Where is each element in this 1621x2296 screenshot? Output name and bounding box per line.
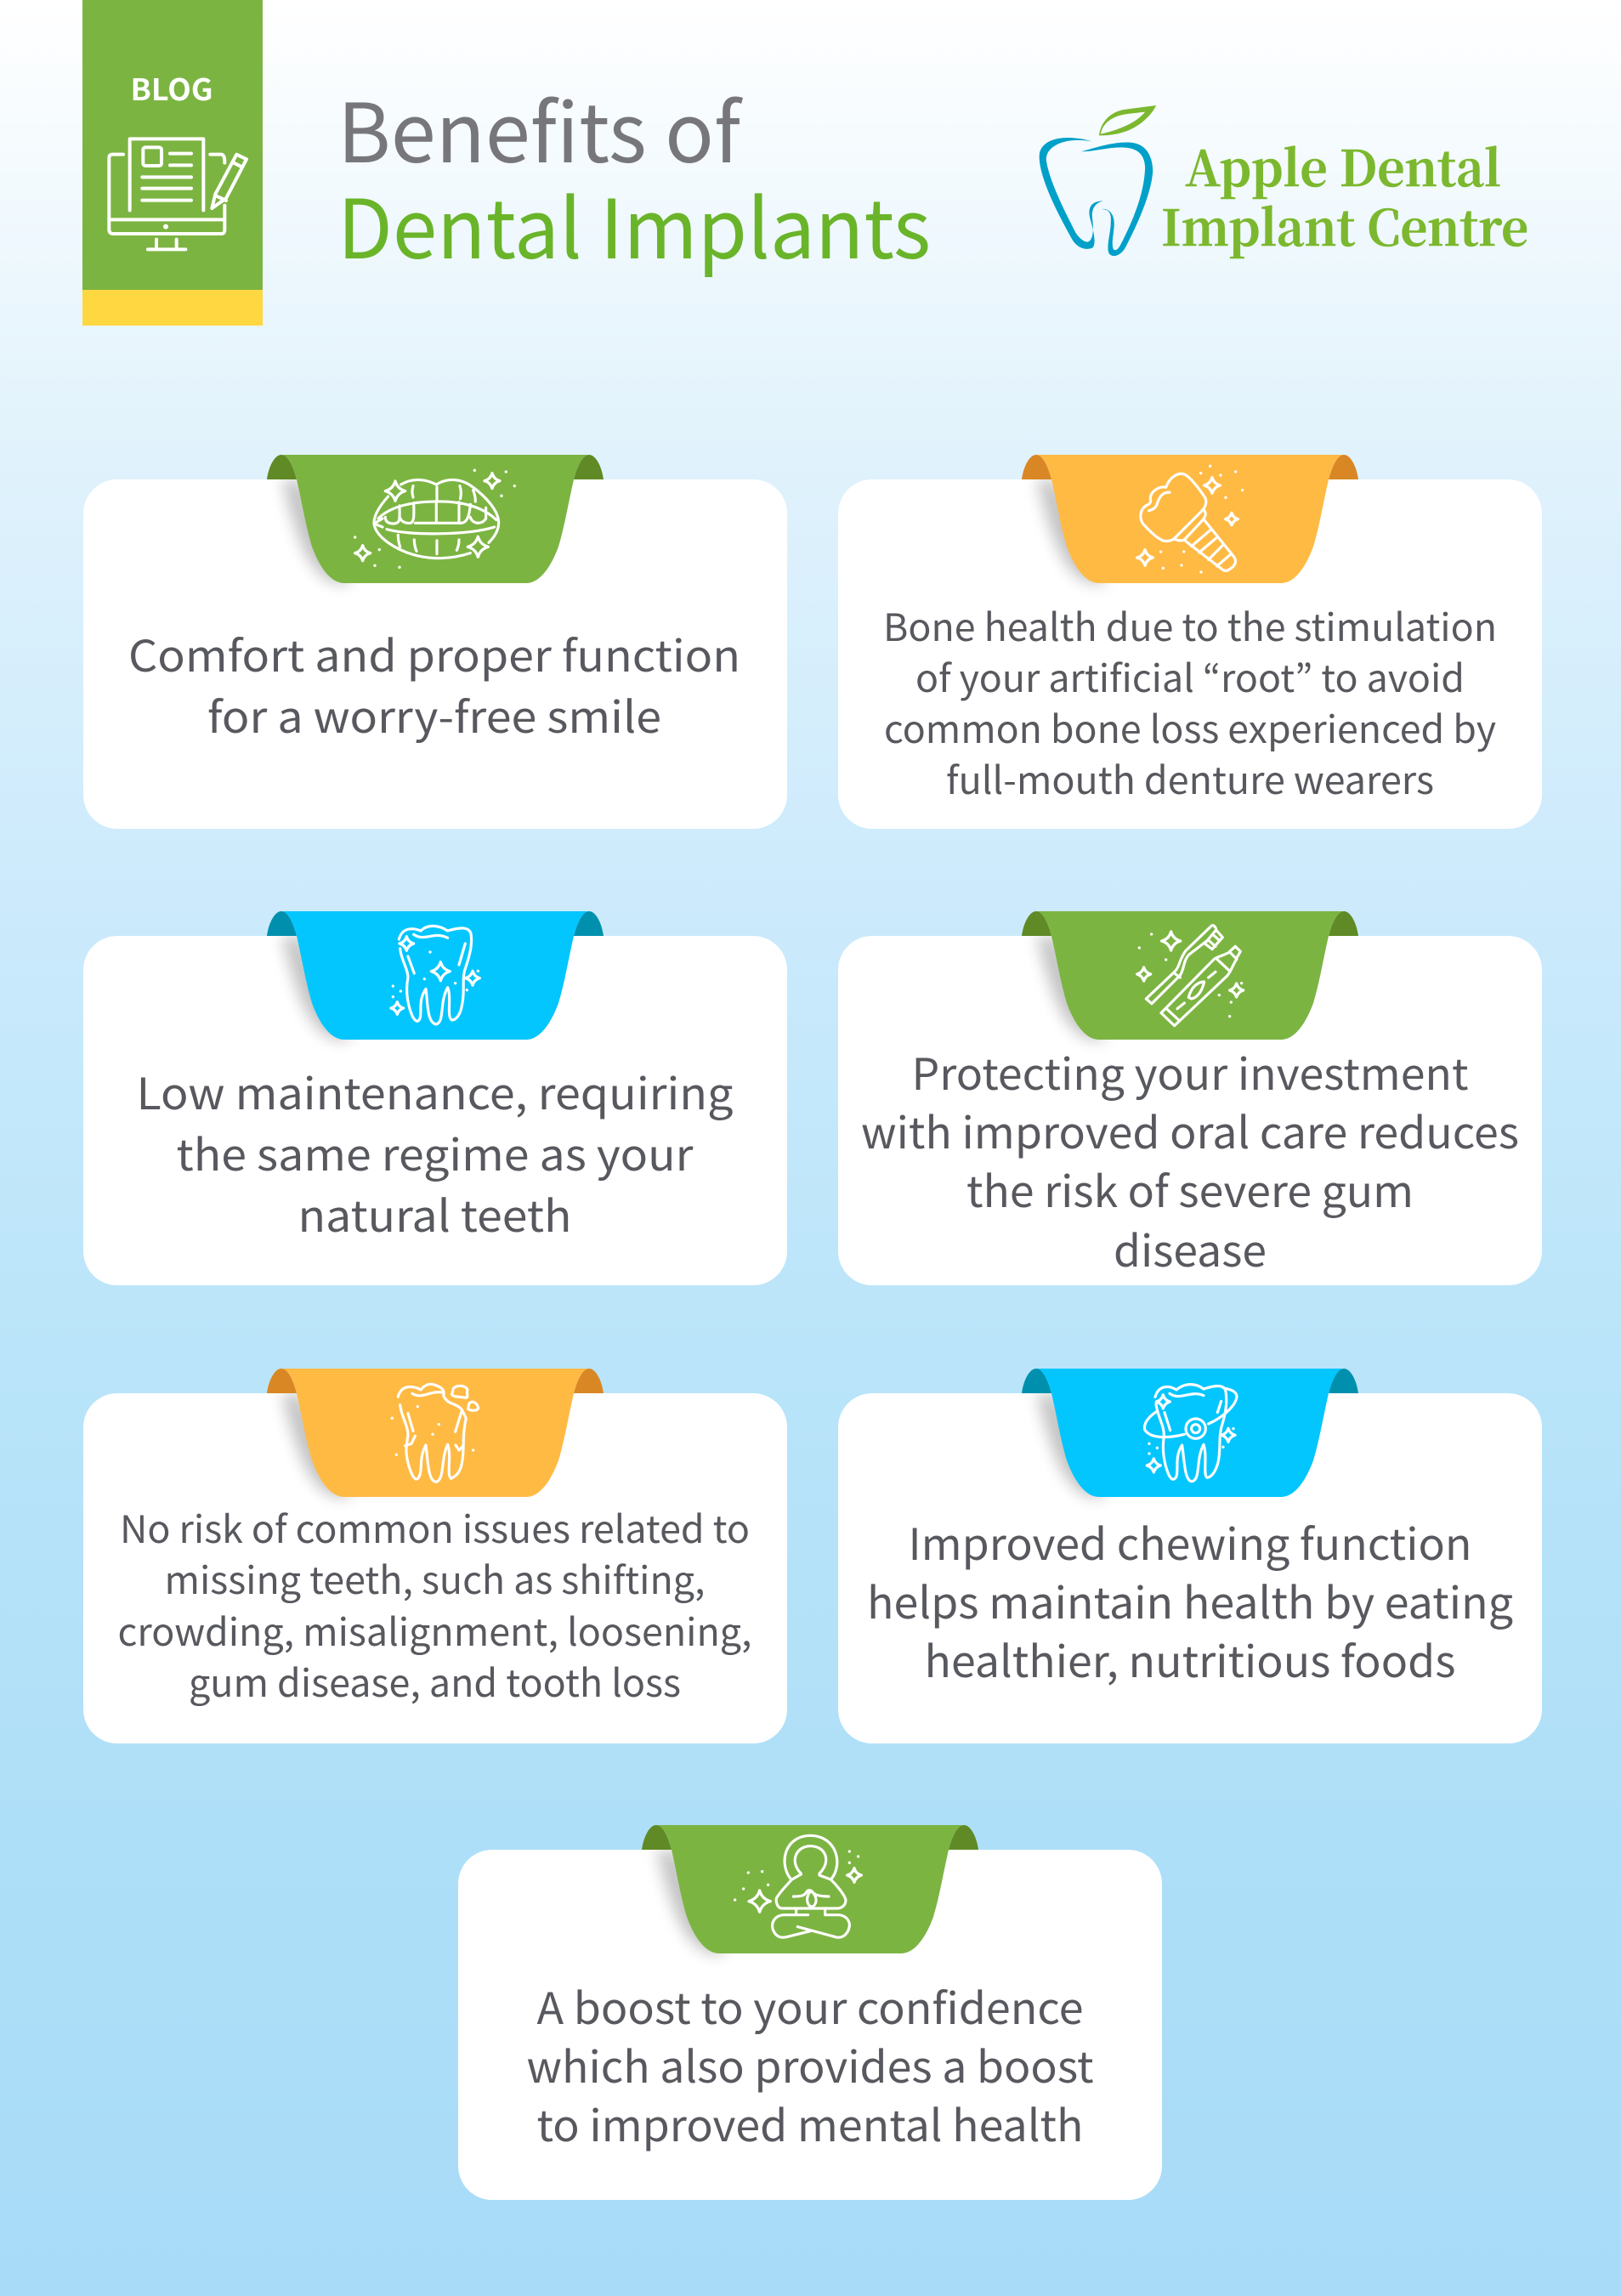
text: with improved oral care reduces xyxy=(861,1098,1519,1161)
text xyxy=(117,1499,751,1708)
text: Comfort and proper function xyxy=(128,621,740,684)
text: full-mouth denture wearers xyxy=(946,750,1434,805)
icon: meditating person xyxy=(735,1835,861,1937)
text: common bone loss experienced by xyxy=(884,699,1496,754)
text xyxy=(867,1510,1513,1690)
ribbon: orange xyxy=(1022,455,1358,583)
ribbon: orange xyxy=(267,1369,604,1497)
title: Benefits of xyxy=(337,68,744,186)
text: Improved chewing function xyxy=(908,1510,1472,1573)
icon: computer with document and pencil xyxy=(109,139,247,249)
ribbon: green xyxy=(642,1825,978,1953)
text: No risk of common issues related to xyxy=(120,1499,750,1554)
panel: no risk of common issues xyxy=(83,1369,787,1743)
panel: protecting your investment xyxy=(838,911,1542,1285)
text: crowding, misalignment, loosening, xyxy=(117,1602,751,1657)
panel: bone health xyxy=(838,455,1542,829)
text: missing teeth, such as shifting, xyxy=(165,1550,706,1605)
panel: improved chewing function xyxy=(838,1369,1542,1743)
blog tab xyxy=(82,0,263,326)
blog label: BLOG xyxy=(131,66,213,110)
text xyxy=(527,1974,1093,2154)
text xyxy=(883,597,1497,805)
ribbon: blue xyxy=(1022,1369,1358,1497)
text: for a worry-free smile xyxy=(207,683,661,745)
text xyxy=(136,1059,734,1244)
icon: decaying tooth xyxy=(392,1384,479,1482)
logo name xyxy=(1161,129,1528,260)
text xyxy=(128,621,740,745)
text: natural teeth xyxy=(298,1182,571,1244)
text: A boost to your confidence xyxy=(537,1974,1083,2037)
text: which also provides a boost xyxy=(527,2032,1093,2095)
icon: clean tooth xyxy=(391,926,479,1024)
text: Low maintenance, requiring xyxy=(136,1059,734,1122)
panel: low maintenance xyxy=(83,911,787,1285)
icon: smiling teeth xyxy=(355,470,514,567)
icon: toothbrush and toothpaste xyxy=(1137,926,1244,1026)
ribbon: blue xyxy=(267,911,604,1040)
ribbon: green xyxy=(267,455,604,583)
title xyxy=(337,68,931,282)
icon: dental implant xyxy=(1137,466,1243,572)
text: disease xyxy=(1114,1216,1267,1279)
title: Dental Implants xyxy=(337,164,931,282)
text: of your artificial “root” to avoid xyxy=(915,648,1465,703)
ribbon: green xyxy=(1022,911,1358,1040)
text: healthier, nutritious foods xyxy=(925,1627,1455,1690)
text: helps maintain health by eating xyxy=(867,1568,1513,1631)
text xyxy=(861,1040,1519,1279)
text: to improved mental health xyxy=(537,2091,1083,2154)
text: Bone health due to the stimulation xyxy=(883,597,1497,652)
logo name: Implant Centre xyxy=(1161,189,1528,260)
panel: comfort and function xyxy=(83,455,787,829)
logo name: Apple Dental xyxy=(1185,129,1501,201)
logo: Apple Dental Implant Centre xyxy=(1040,105,1528,260)
text: the risk of severe gum xyxy=(966,1157,1414,1220)
icon: apple tooth logo mark xyxy=(1040,105,1156,256)
icon: tooth with orbit xyxy=(1144,1385,1237,1482)
panel: boost to confidence xyxy=(458,1825,1162,2200)
text: Protecting your investment xyxy=(911,1040,1469,1103)
text: the same regime as your xyxy=(177,1120,694,1183)
text: gum disease, and tooth loss xyxy=(189,1653,681,1708)
